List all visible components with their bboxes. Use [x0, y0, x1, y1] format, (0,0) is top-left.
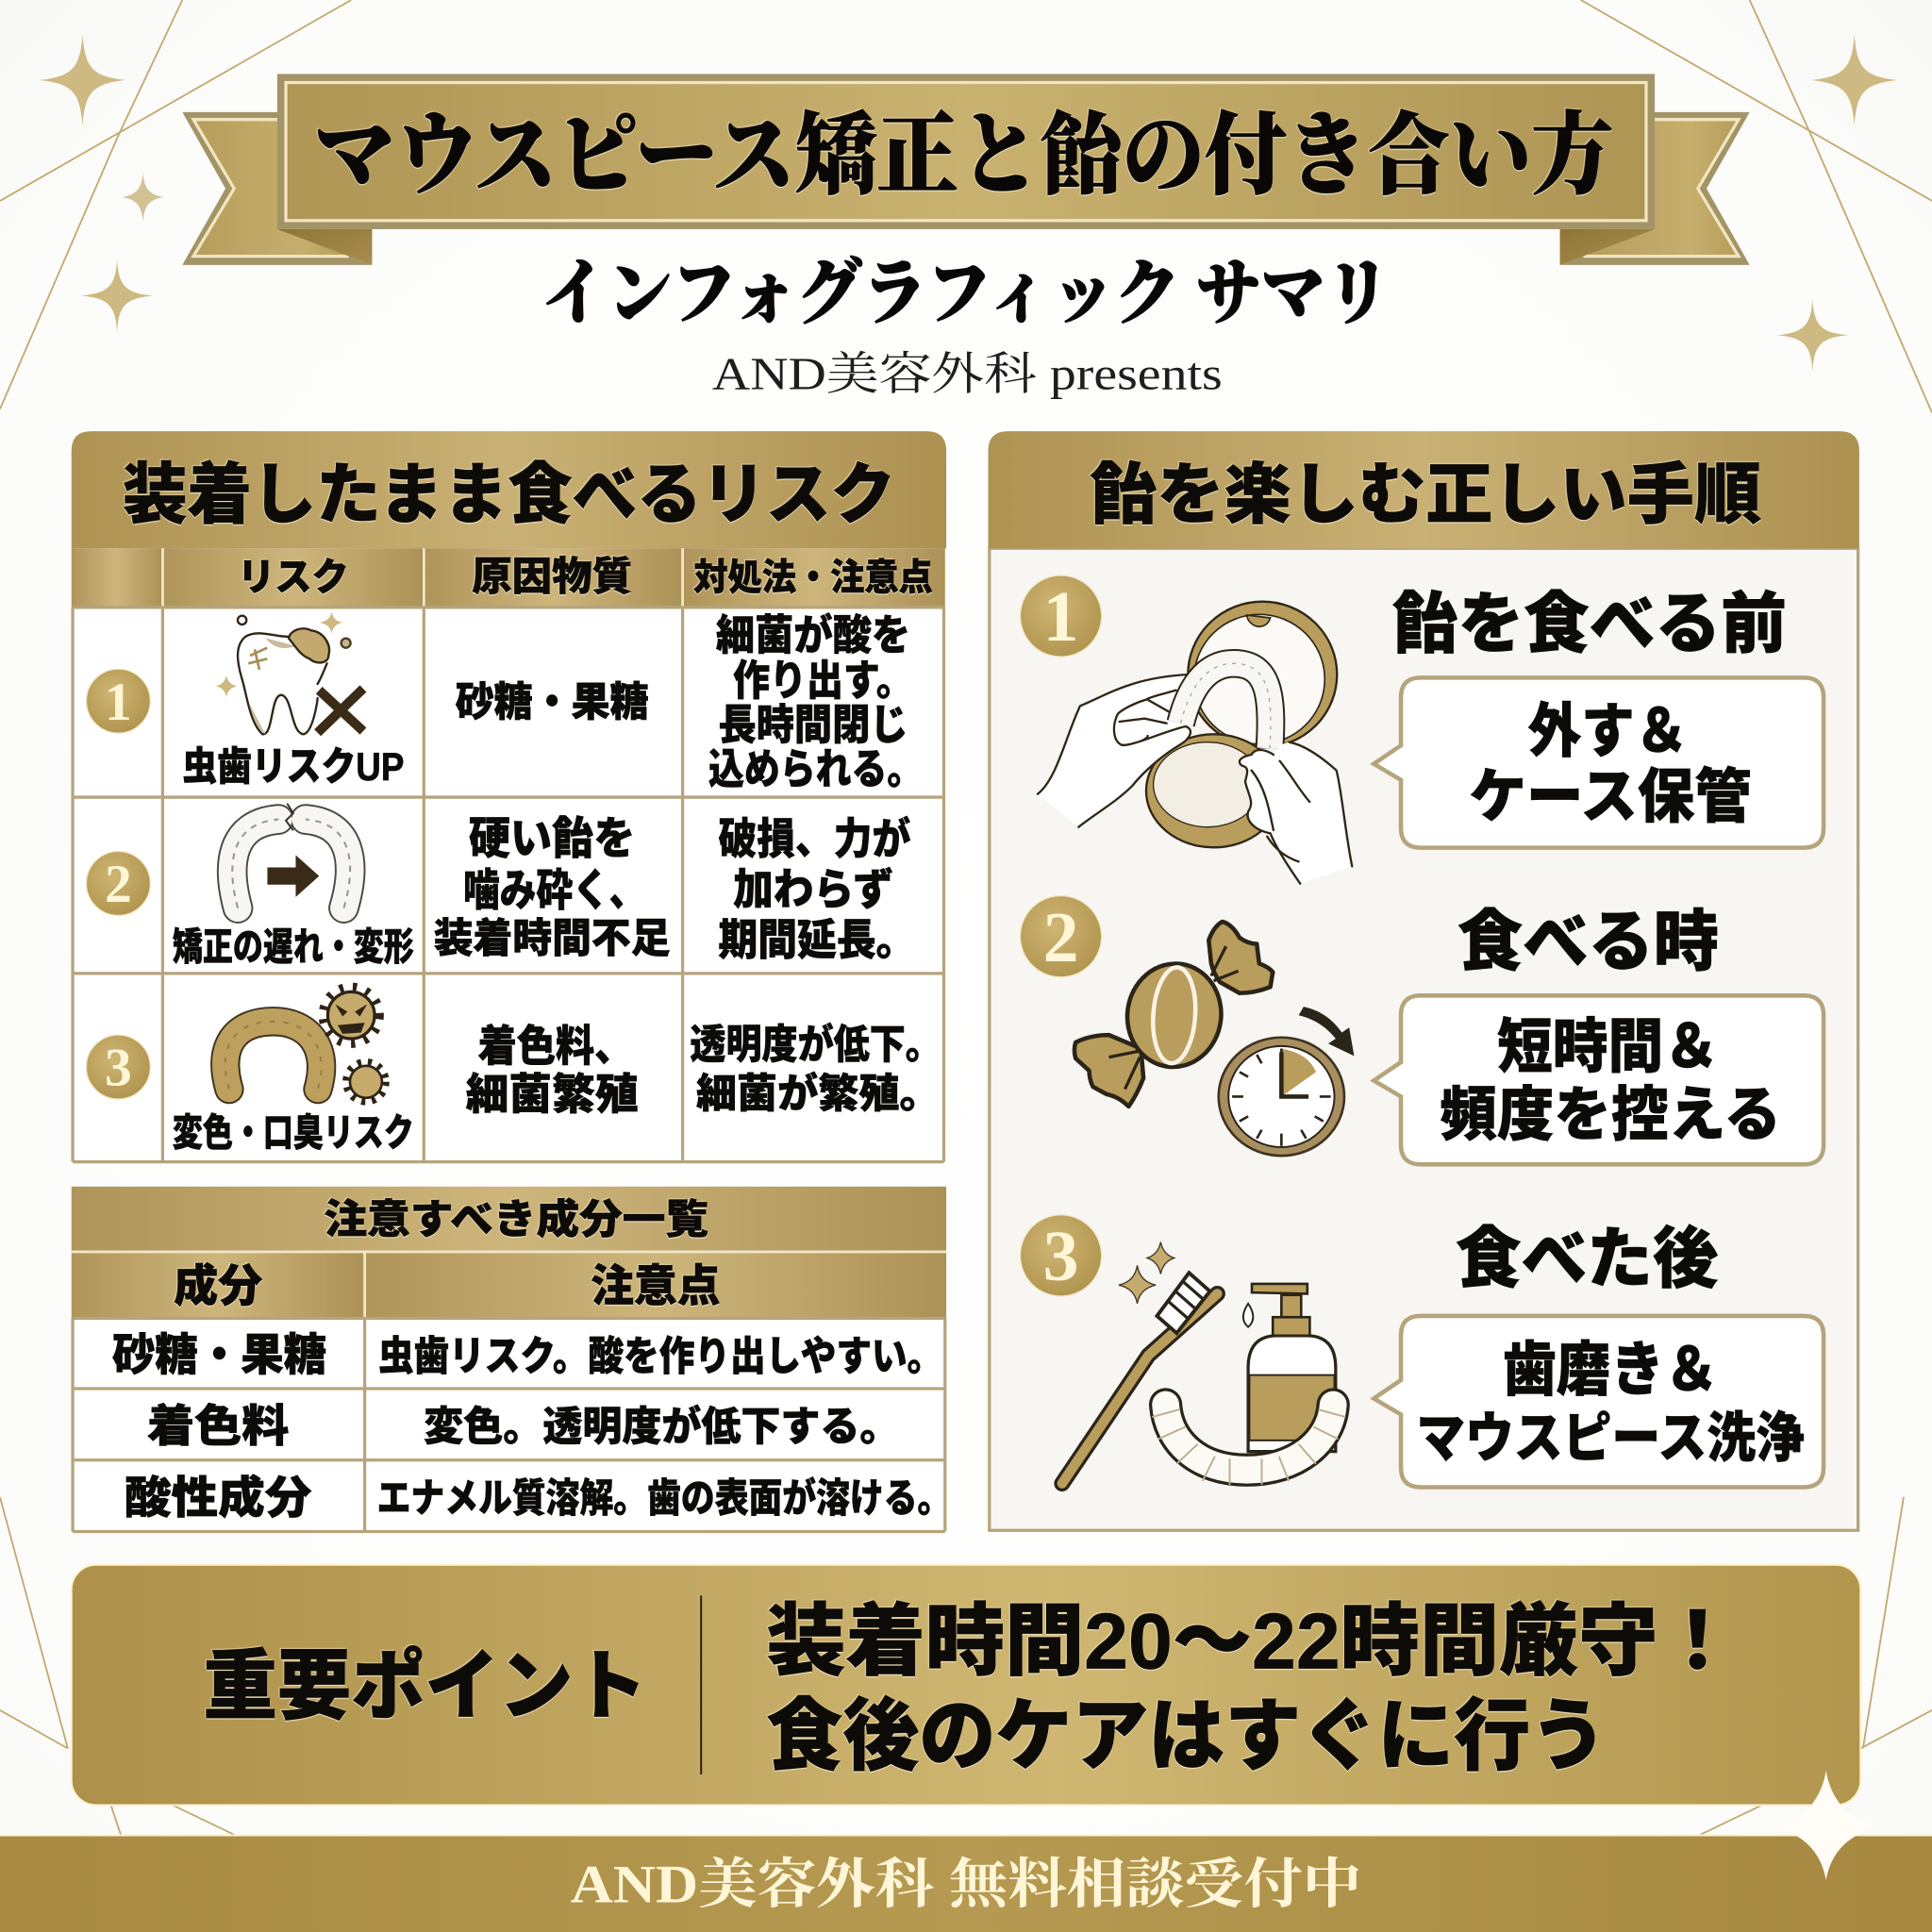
step 1 — [1020, 575, 1824, 884]
icon: sparkle left lower — [81, 258, 153, 333]
number badge 2 — [1020, 896, 1102, 977]
table header: 成分 — [174, 1260, 262, 1310]
callout bubble — [1374, 1316, 1824, 1487]
risk label: 矯正の遅れ・変形 — [173, 924, 414, 968]
cause — [466, 1023, 639, 1119]
cause — [434, 813, 671, 962]
number badge 2: 2 — [1043, 898, 1079, 977]
number badge 1 — [1020, 575, 1102, 657]
number badge 1 — [86, 669, 150, 733]
number badge 2: 2 — [105, 855, 132, 914]
icon: sparkle top left — [40, 35, 125, 125]
key point message: 食後のケアはすぐに行う — [766, 1691, 1607, 1780]
panel heading: 装着したまま食べるリスク — [123, 458, 895, 532]
icon: bottle — [1243, 1284, 1336, 1452]
subtitle: インフォグラフィック サマリ — [542, 255, 1390, 334]
icon: clean aligner — [1152, 1405, 1345, 1485]
ingredient rows — [112, 1329, 951, 1523]
number badge 3: 3 — [1043, 1217, 1079, 1296]
step 2 — [1020, 896, 1824, 1164]
table header: 原因物質 — [472, 555, 632, 599]
icon: toothbrush — [1062, 1273, 1217, 1484]
countermeasure: 期間延長。 — [718, 916, 915, 964]
panel: ingredients table — [72, 1187, 951, 1532]
number badge 3 — [86, 1035, 150, 1099]
countermeasure — [718, 815, 915, 964]
callout: key point — [72, 1565, 1860, 1805]
number badge 1: 1 — [105, 673, 132, 732]
title: マウスピース矯正と飴の付き合い方 — [313, 108, 1613, 206]
arrow: elapsed time — [1299, 1007, 1354, 1056]
callout bubble — [1374, 677, 1824, 848]
countermeasure: 長時間閉じ — [718, 703, 908, 749]
key point label: 重要ポイント — [204, 1645, 647, 1730]
cause: 硬い飴を — [469, 813, 635, 863]
countermeasure — [708, 611, 923, 793]
cause: 細菌繁殖 — [466, 1071, 639, 1119]
key point message: 装着時間20～22時間厳守！ — [766, 1596, 1738, 1685]
callout bubble: 短時間＆ — [1497, 1014, 1719, 1080]
icon: small bacteria — [347, 1063, 385, 1100]
countermeasure: 破損、力が — [718, 815, 910, 863]
cause: 装着時間不足 — [434, 917, 671, 962]
step title: 食べる時 — [1457, 905, 1719, 979]
icon: aligner and case in hands — [1038, 602, 1352, 884]
icon: sparkle left small — [122, 173, 164, 222]
ingredient rows: エナメル質溶解。歯の表面が溶ける。 — [377, 1476, 951, 1521]
table header: リスク — [238, 556, 349, 599]
callout bubble: 頻度を控える — [1440, 1082, 1781, 1148]
icon: stained aligner — [225, 1022, 322, 1090]
icon: sparkles — [1119, 1242, 1174, 1304]
icon: large bacteria — [325, 990, 377, 1041]
countermeasure: 細菌が繁殖。 — [696, 1071, 941, 1117]
callout bubble — [1374, 995, 1824, 1164]
panel: correct procedure — [989, 431, 1859, 1530]
panel: risks of eating while wearing — [72, 431, 946, 1162]
footer band — [0, 1835, 1932, 1932]
number badge 2 — [86, 852, 150, 915]
countermeasure: 細菌が酸を — [716, 611, 910, 658]
number badge 3: 3 — [105, 1039, 132, 1098]
table header: 注意点 — [591, 1260, 720, 1310]
ingredient rows: 砂糖・果糖 — [112, 1329, 326, 1379]
callout bubble: 歯磨き＆ — [1503, 1337, 1718, 1403]
countermeasure — [690, 1022, 941, 1117]
cause: 噛み砕く、 — [463, 865, 645, 915]
risk label: 虫歯リスクUP — [182, 744, 404, 789]
presenter line: AND美容外科 presents — [712, 350, 1223, 400]
countermeasure: 加わらず — [733, 866, 893, 914]
icon: candy — [1074, 922, 1273, 1107]
icon: clock — [1219, 1038, 1344, 1156]
number badge 3 — [1020, 1215, 1102, 1296]
callout bubble: マウスピース洗浄 — [1416, 1408, 1805, 1469]
ingredient rows: 虫歯リスク。酸を作り出しやすい。 — [378, 1334, 942, 1379]
step title: 食べた後 — [1456, 1221, 1718, 1295]
icon: broken aligner — [232, 804, 350, 908]
ingredient rows: 変色。透明度が低下する。 — [424, 1404, 899, 1450]
countermeasure: 作り出す。 — [733, 658, 913, 705]
number badge 1: 1 — [1043, 577, 1079, 657]
panel heading — [989, 431, 1859, 548]
ingredient rows: 着色料 — [147, 1401, 289, 1451]
table title: 注意すべき成分一覧 — [325, 1196, 708, 1242]
table header — [174, 1260, 720, 1310]
risk label: 変色・口臭リスク — [173, 1111, 414, 1155]
row 1 — [86, 611, 923, 793]
icon: sparkle top right — [1811, 35, 1897, 125]
cause: 砂糖・果糖 — [456, 680, 649, 725]
step 3 — [1020, 1215, 1824, 1487]
icon: large white sparkle — [1774, 1771, 1879, 1880]
panel heading: 飴を楽しむ正しい手順 — [1090, 458, 1761, 532]
row 2 — [86, 804, 915, 968]
callout bubble: 外す＆ — [1528, 699, 1688, 765]
table header — [238, 555, 933, 599]
risk table — [72, 548, 945, 1162]
footer text: AND美容外科 無料相談受付中 — [571, 1856, 1361, 1915]
key point message — [766, 1596, 1738, 1780]
icon: decayed tooth — [215, 611, 363, 734]
row 3 — [86, 990, 941, 1155]
step title: 飴を食べる前 — [1392, 587, 1787, 661]
title ribbon — [182, 74, 1750, 265]
countermeasure: 透明度が低下。 — [690, 1022, 941, 1068]
ingredient rows: 酸性成分 — [125, 1473, 311, 1523]
callout bubble: ケース保管 — [1470, 764, 1752, 830]
countermeasure: 込められる。 — [708, 747, 923, 793]
panel heading — [72, 431, 946, 548]
icon: sparkle right — [1776, 298, 1848, 372]
cause: 着色料、 — [478, 1023, 633, 1071]
table header: 対処法・注意点 — [693, 558, 933, 599]
